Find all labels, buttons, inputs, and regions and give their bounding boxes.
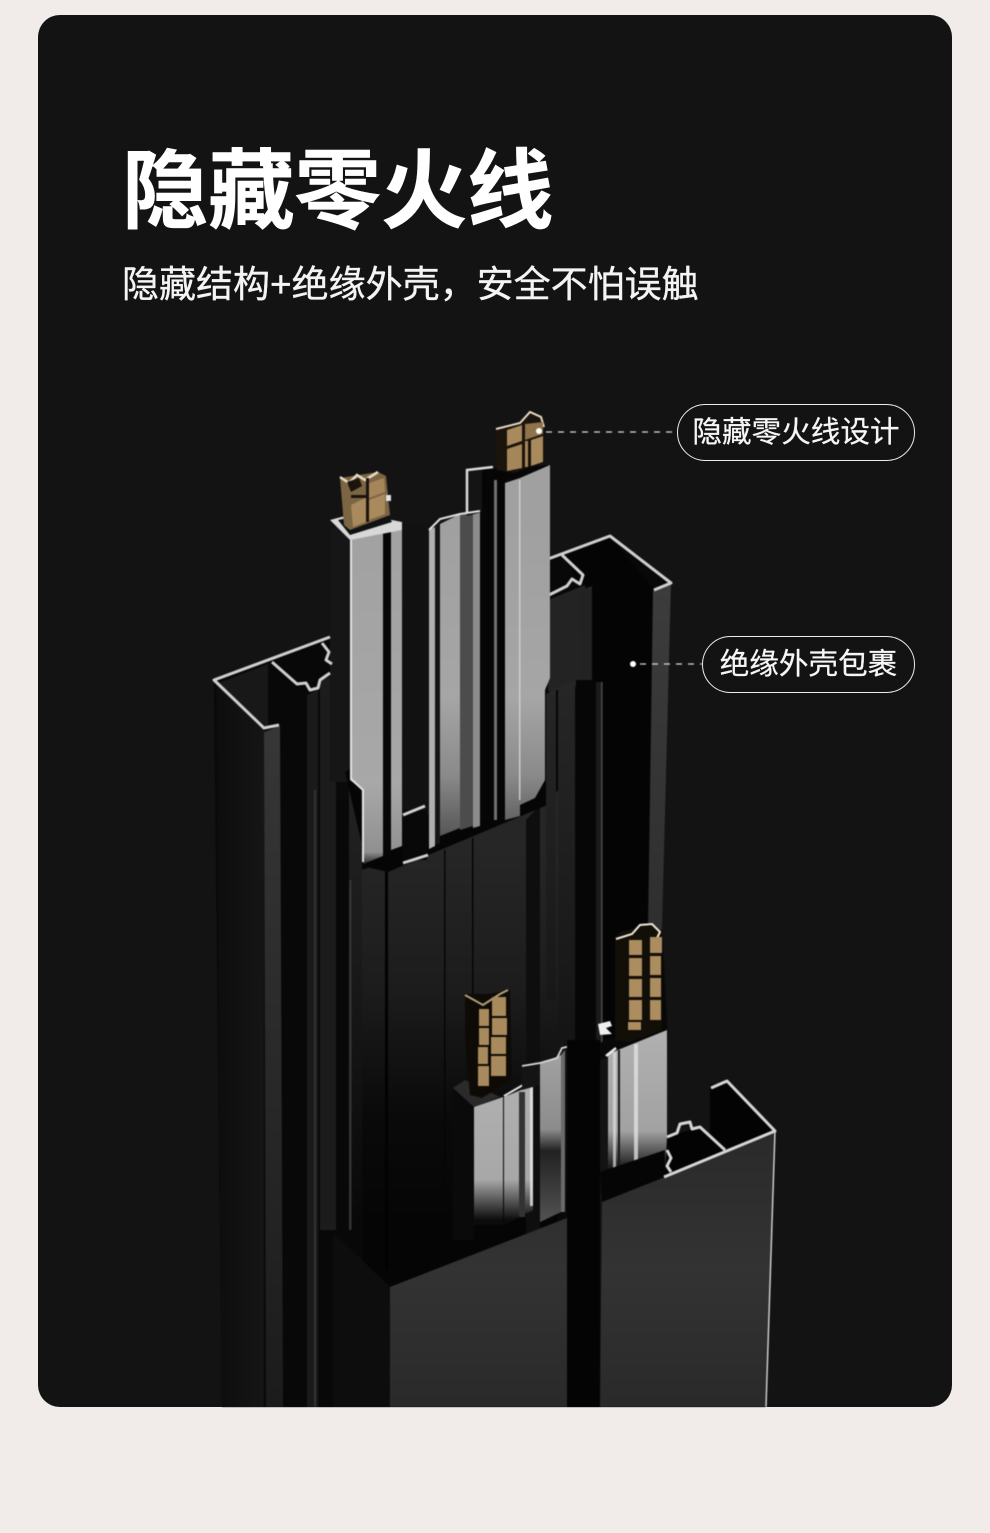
rail: lower left silver rail <box>453 1046 571 1240</box>
block: front lower right cover with open profile <box>600 1081 775 1407</box>
leader line: hidden wire design <box>546 431 677 433</box>
profile: left outer wall <box>214 527 362 1407</box>
profile: right upper wall <box>548 536 671 1407</box>
callout: insulation shell <box>702 636 915 693</box>
rim: left profile section <box>214 637 332 728</box>
block: front lower left cover <box>333 1218 567 1407</box>
profile: central channel <box>345 688 558 1407</box>
rail: lower right silver rail <box>567 1021 667 1407</box>
rim: right upper profile section <box>548 536 671 595</box>
callout: insulation shell: 绝缘外壳包裹 <box>720 648 897 681</box>
rail: upper right silver rail <box>429 465 550 849</box>
callout: hidden wire design: 隐藏零火线设计 <box>692 416 900 449</box>
callout: hidden wire design <box>677 404 915 461</box>
connector: upper left copper conductor <box>340 472 391 530</box>
connector: lower right copper conductor <box>615 924 662 1042</box>
connector: lower left copper conductor <box>465 990 512 1098</box>
rim: lower right profile section <box>664 1081 775 1407</box>
subtitle: 隐藏结构+绝缘外壳，安全不怕误触 <box>122 264 699 305</box>
connector: upper right copper conductor <box>495 410 544 473</box>
profile: main black body <box>214 465 671 1407</box>
leader line: insulation shell <box>630 661 702 667</box>
rail: upper left silver rail <box>330 510 428 864</box>
title: 隐藏零火线 <box>122 144 553 240</box>
